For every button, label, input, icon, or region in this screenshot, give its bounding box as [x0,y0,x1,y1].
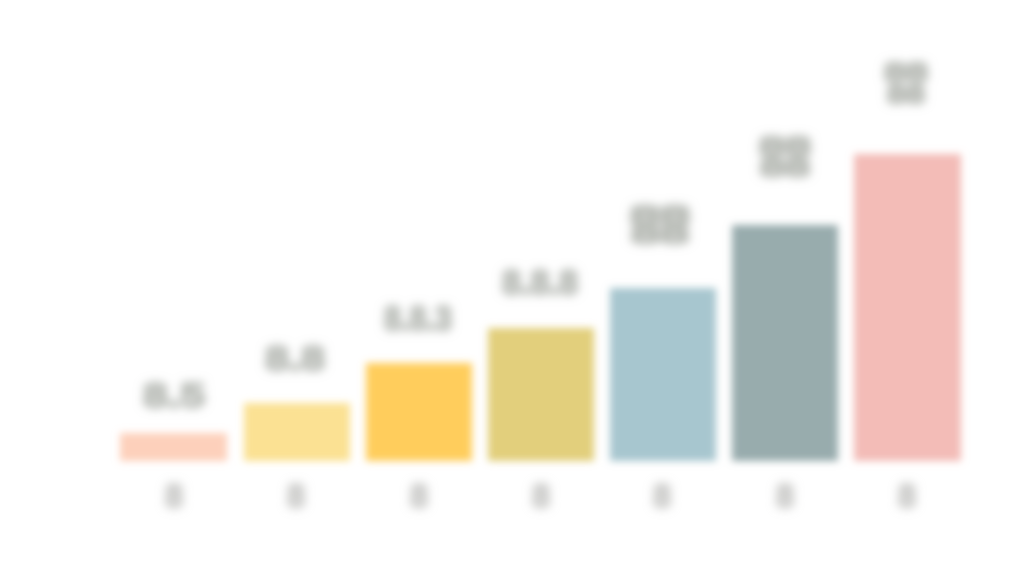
value label 2: 8.8 [265,340,325,378]
bar 5 [610,288,716,461]
category labels [165,478,916,514]
category label 1: 8 [165,478,183,514]
category label 6: 8 [776,478,794,514]
bar 1 [120,433,227,461]
category label 4: 8 [532,478,550,514]
bar 3 [366,363,472,461]
value labels [143,57,928,415]
value label 6: 88 [760,152,810,182]
value label 4: 8.8.8 [502,264,578,302]
value label 3: 8.8.3 [384,300,452,338]
bar 7 [854,154,961,461]
value label 6: 88 [759,131,811,161]
value label 5: 88 [630,200,690,230]
bar 6 [732,225,838,461]
category label 2: 8 [287,478,305,514]
category label 3: 8 [410,478,428,514]
bars [120,154,961,461]
value label 5 [630,200,690,249]
value label 7: 88 [887,79,925,109]
value label 5: 88 [631,219,689,249]
bar 4 [488,328,594,461]
value label 7 [884,57,928,109]
bar 2 [244,403,350,461]
value label 6 [759,131,811,182]
value label 1: 8.5 [143,377,205,415]
category label 5: 8 [653,478,671,514]
value label 7: 88 [884,57,928,87]
category label 7: 8 [898,478,916,514]
